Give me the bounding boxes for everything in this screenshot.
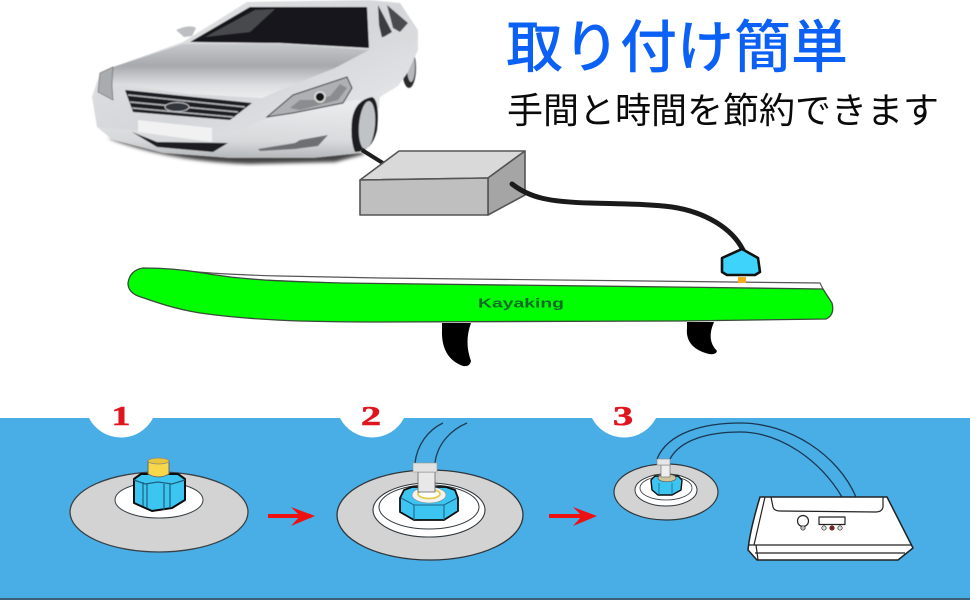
hood [113,44,369,98]
mirrors [176,26,196,37]
title: 取り付け簡単 [506,16,848,80]
step 1 badge [89,402,153,438]
plate [138,120,212,142]
headlight [267,77,352,117]
fins [442,323,471,366]
arrow 2 [549,507,597,526]
arrow 1 [268,507,315,526]
white deck strip [175,270,824,291]
lower bumper [97,100,376,158]
step 2 badge: 2 [361,401,381,431]
step 2 badge [340,401,404,438]
rear wheel [402,48,416,88]
subtitle: 手間と時間を節約できます [507,90,939,131]
green hull [128,268,833,322]
steps band [0,418,970,600]
air pump [748,497,913,560]
step 2 valve [337,423,523,560]
lower intake [132,132,228,152]
nozzle [722,249,760,283]
board: Kayaking [128,268,833,366]
step 1 badge: 1 [112,402,130,432]
front wheel [351,97,378,152]
board label: Kayaking [478,296,564,310]
car [92,0,418,164]
step 3 valve and hose [614,423,856,520]
step 1 valve [70,458,248,552]
grille [125,90,252,120]
step 3 badge [592,401,656,438]
hose to nozzle [512,184,743,250]
step 3 badge: 3 [613,401,633,431]
cable: car to box [362,150,386,165]
windshield [190,7,369,48]
junction box [360,151,525,215]
side windows [378,5,392,38]
fog light [258,135,328,151]
